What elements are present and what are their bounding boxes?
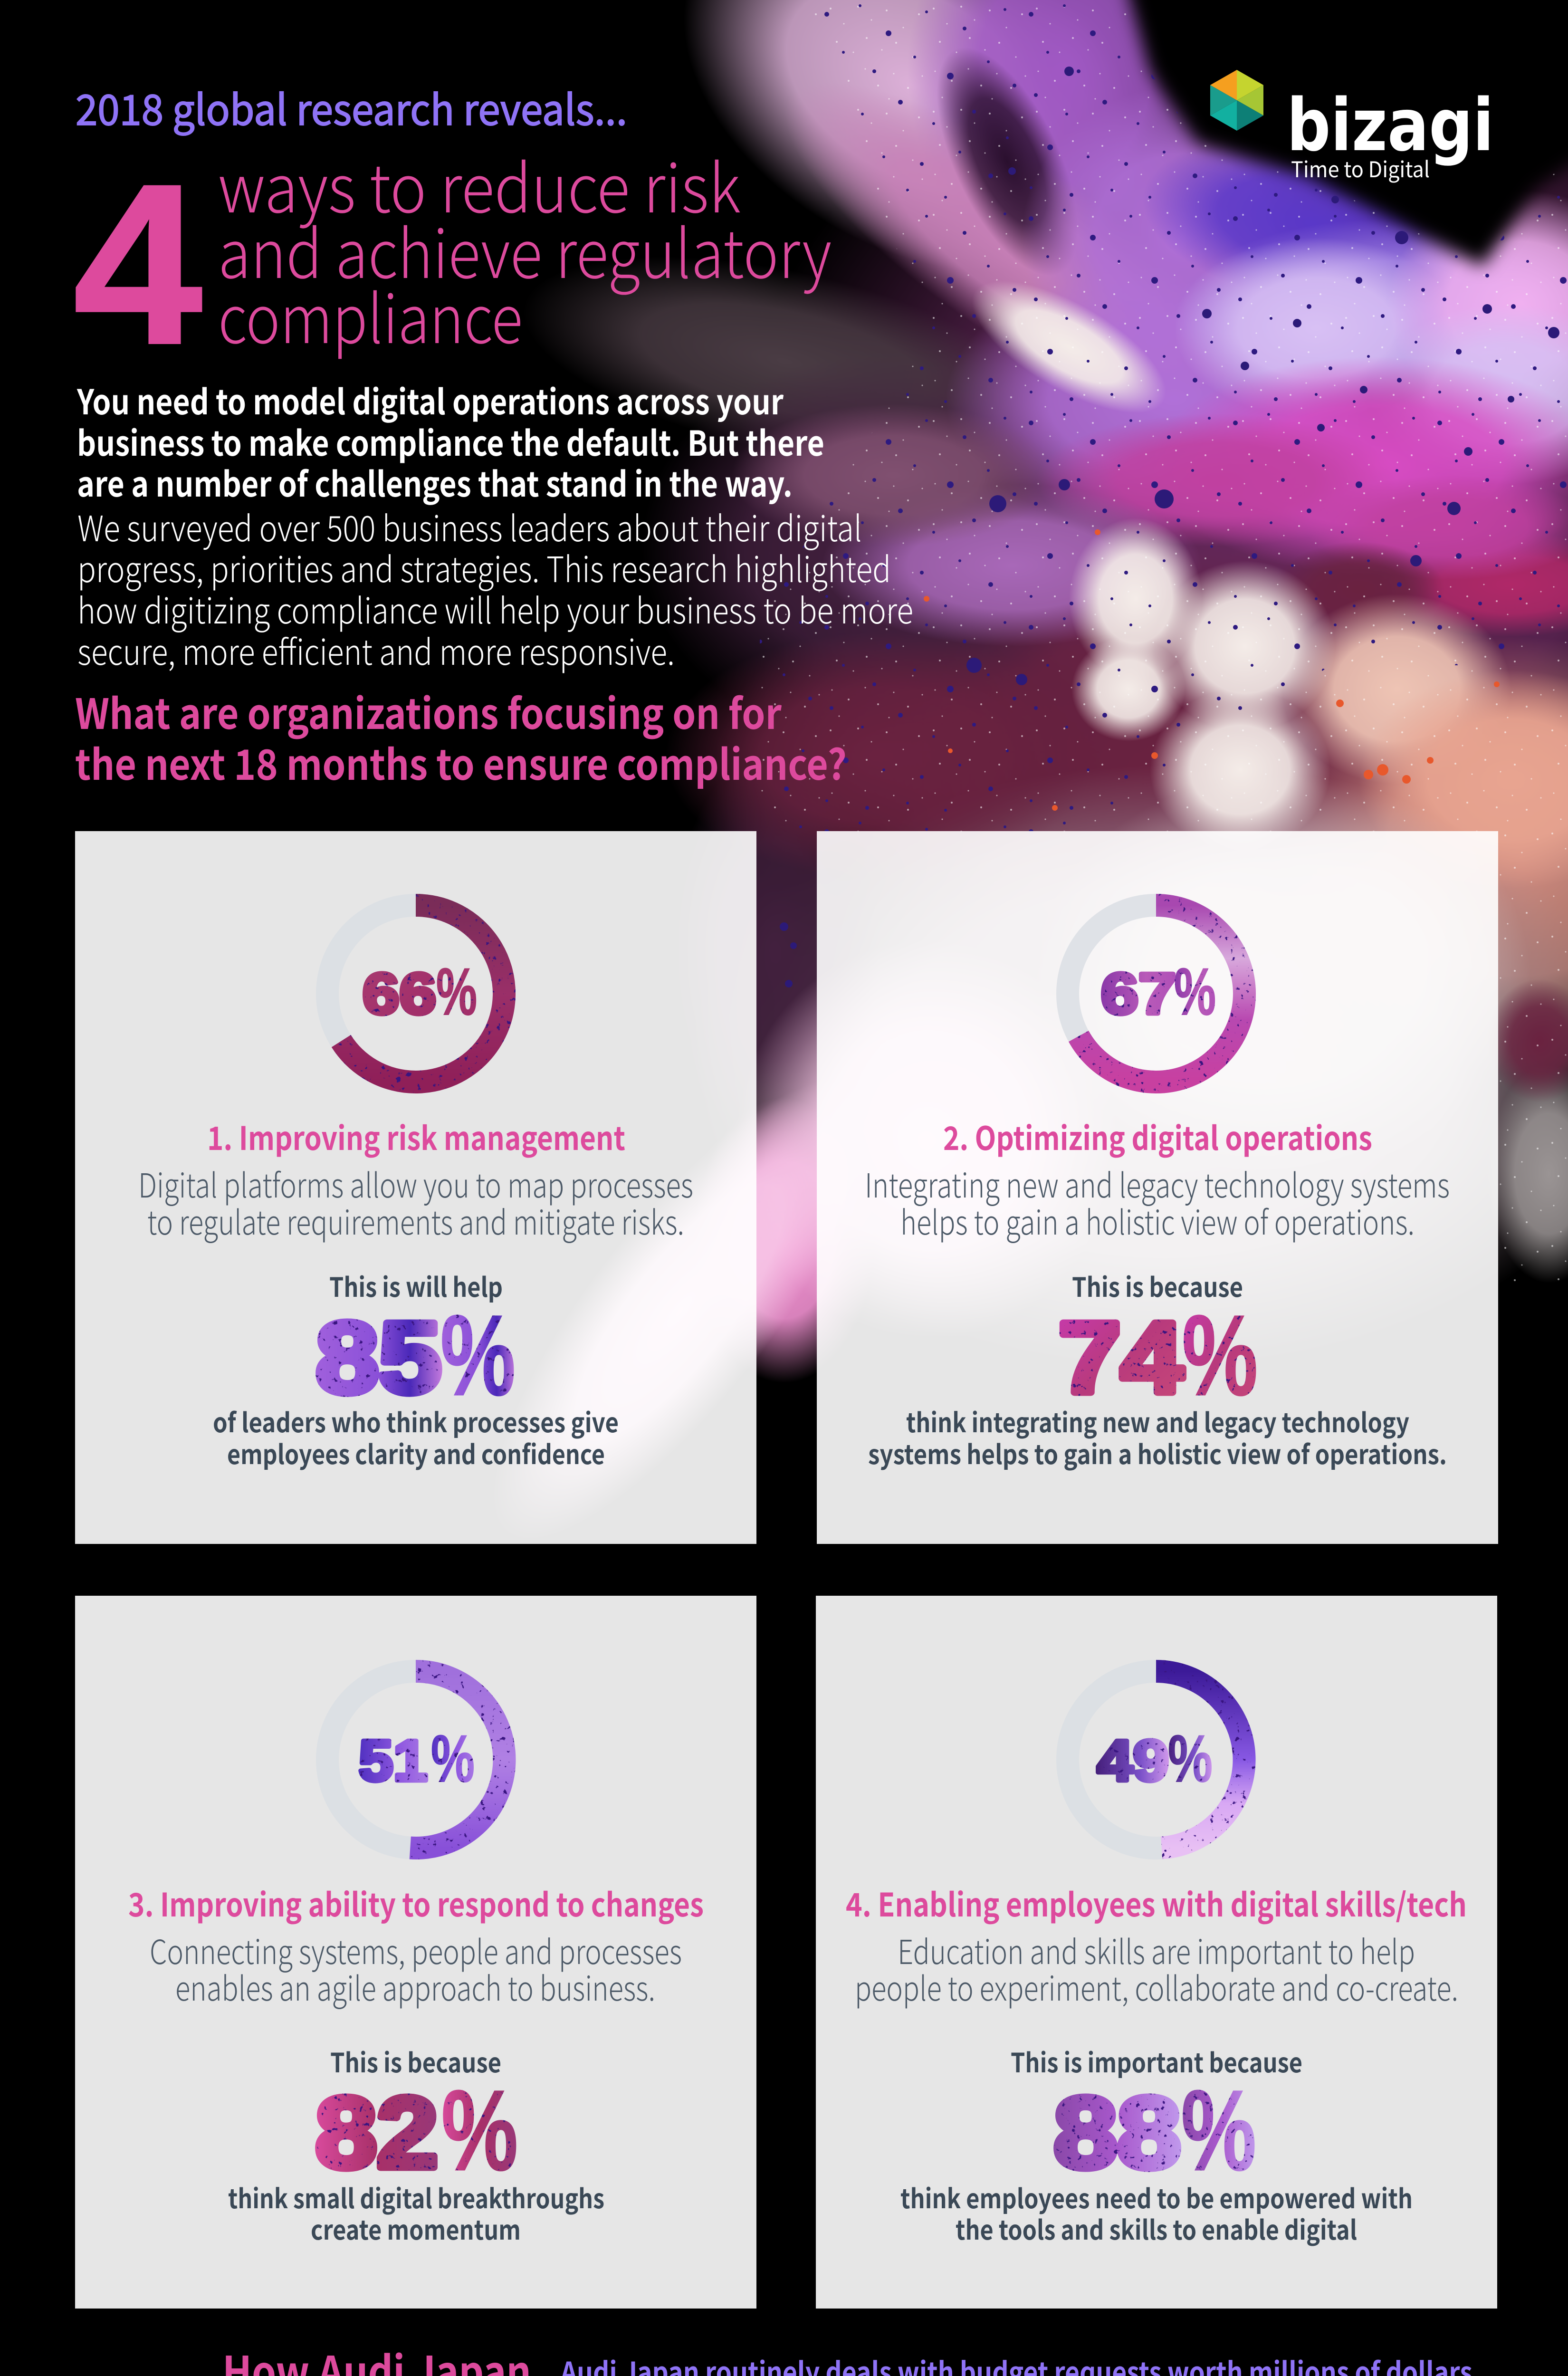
statistic: 74% bbox=[1059, 1292, 1258, 1419]
title text: compliance bbox=[218, 267, 523, 363]
title text bbox=[218, 136, 832, 363]
description: Integrating new and legacy technology systems bbox=[865, 1159, 1450, 1207]
stat caption: think small digital breakthroughs bbox=[228, 2178, 604, 2216]
heading: 1. Improving risk management bbox=[207, 1112, 625, 1159]
description: enables an agile approach to business. bbox=[175, 1963, 655, 2011]
donut chart: 67% bbox=[1068, 905, 1244, 1082]
stat caption bbox=[213, 1402, 619, 1472]
stat caption: of leaders who think processes give bbox=[213, 1402, 619, 1440]
statistic: 85%: 85 bbox=[316, 1301, 441, 1414]
stat caption: think employees need to be empowered with bbox=[900, 2178, 1413, 2216]
stat caption: create momentum bbox=[311, 2209, 521, 2248]
statistic: 74%: 74 bbox=[1059, 1301, 1183, 1414]
title: 4 ways to reduce risk bbox=[73, 136, 832, 392]
stat caption: the tools and skills to enable digital bbox=[956, 2209, 1357, 2248]
description bbox=[855, 1926, 1458, 2011]
heading: 4. Enabling employees with digital skills/tech bbox=[846, 1879, 1467, 1926]
intro: survey paragraph: We surveyed over 500 business leaders about their digital bbox=[77, 501, 862, 552]
eyebrow: 2018 global research reveals: 2018 global research reveals... bbox=[76, 77, 627, 137]
statistic: 88%: 88 bbox=[1054, 2076, 1181, 2189]
description: Digital platforms allow you to map processes bbox=[138, 1159, 693, 1207]
statistic: 85% bbox=[316, 1292, 516, 1419]
intro: survey paragraph: how digitizing compliance will help your business to be more bbox=[77, 583, 913, 634]
stat caption: employees clarity and confidence bbox=[227, 1434, 605, 1472]
icon: hexagon cube bbox=[1210, 70, 1263, 131]
title text: ways to reduce risk bbox=[218, 136, 741, 232]
panel: 1 improving risk management bbox=[75, 831, 756, 1544]
intro: bold lead: business to make compliance the default. But there bbox=[77, 416, 824, 466]
logo: bizagi bbox=[1210, 70, 1494, 184]
donut chart: 67%: % bbox=[1174, 954, 1216, 1029]
description: helps to gain a holistic view of operations. bbox=[900, 1197, 1415, 1245]
donut chart: 66%: % bbox=[436, 954, 477, 1029]
powder particles bbox=[756, 0, 1568, 1283]
intro: bold lead: are a number of challenges that stand in the way. bbox=[77, 457, 793, 507]
description: Education and skills are important to help bbox=[898, 1926, 1415, 1974]
question heading bbox=[75, 681, 847, 792]
intro: bold lead: You need to model digital operations across your bbox=[76, 374, 784, 424]
statistic: 88%: % bbox=[1181, 2067, 1256, 2194]
intro: survey paragraph: secure, more efficient and more responsive. bbox=[77, 624, 675, 675]
stat caption: systems helps to gain a holistic view of operations. bbox=[868, 1434, 1447, 1472]
description bbox=[138, 1159, 693, 1245]
lead-in: This is because bbox=[1072, 1266, 1243, 1305]
donut chart: 67%: 67 bbox=[1101, 961, 1176, 1026]
wordmark: bizagi bbox=[1287, 83, 1494, 167]
statistic: 74%: % bbox=[1182, 1292, 1258, 1419]
lead-in: This is important because bbox=[1011, 2042, 1302, 2080]
stat caption: think integrating new and legacy technology bbox=[906, 1402, 1409, 1440]
description bbox=[150, 1926, 682, 2011]
donut chart: 51%: % bbox=[431, 1721, 475, 1796]
donut chart: 49% bbox=[1068, 1671, 1244, 1848]
panel: 3 improving ability to respond to changes bbox=[75, 1596, 756, 2309]
heading: 3. Improving ability to respond to changes bbox=[128, 1879, 704, 1926]
intro: bold lead bbox=[76, 374, 824, 507]
donut chart: 49%: 49 bbox=[1097, 1728, 1169, 1793]
lead-in: This is will help bbox=[329, 1266, 503, 1305]
big numeral 4: 4 bbox=[73, 136, 204, 392]
tagline: Time to Digital bbox=[1291, 153, 1430, 184]
statistic: 82%: 82 bbox=[316, 2076, 438, 2189]
statistic: 88% bbox=[1054, 2067, 1256, 2194]
statistic: 85%: % bbox=[440, 1292, 516, 1419]
donut chart: 51% bbox=[327, 1671, 504, 1848]
description: to regulate requirements and mitigate risks. bbox=[147, 1197, 684, 1245]
statistic: 82% bbox=[316, 2067, 518, 2194]
panel: 4 enabling employees bbox=[816, 1596, 1497, 2309]
question heading: What are organizations focusing on for bbox=[75, 681, 782, 741]
stat caption bbox=[900, 2178, 1413, 2248]
donut chart: 66%: 66 bbox=[363, 961, 436, 1026]
description: people to experiment, collaborate and co-create. bbox=[855, 1963, 1458, 2011]
stat caption bbox=[228, 2178, 604, 2248]
background: colour powder explosion bbox=[433, 0, 1568, 1592]
description: Connecting systems, people and processes bbox=[150, 1926, 682, 1974]
donut chart: 66% bbox=[327, 905, 504, 1082]
black corner behind logo bbox=[1123, 0, 1568, 266]
donut chart: 51%: 51 bbox=[359, 1728, 428, 1793]
donut chart: 49%: % bbox=[1168, 1721, 1213, 1796]
lead-in: This is because bbox=[330, 2042, 501, 2080]
stat caption bbox=[868, 1402, 1447, 1472]
title text: and achieve regulatory bbox=[218, 201, 832, 297]
question heading: the next 18 months to ensure compliance? bbox=[75, 732, 847, 792]
statistic: 82%: % bbox=[441, 2067, 518, 2194]
heading: 2. Optimizing digital operations bbox=[943, 1112, 1372, 1159]
description bbox=[865, 1159, 1450, 1245]
panel: 2 optimizing digital operations bbox=[817, 831, 1498, 1544]
intro: survey paragraph bbox=[77, 501, 913, 675]
intro: survey paragraph: progress, priorities and strategies. This research highlighted bbox=[77, 542, 891, 593]
